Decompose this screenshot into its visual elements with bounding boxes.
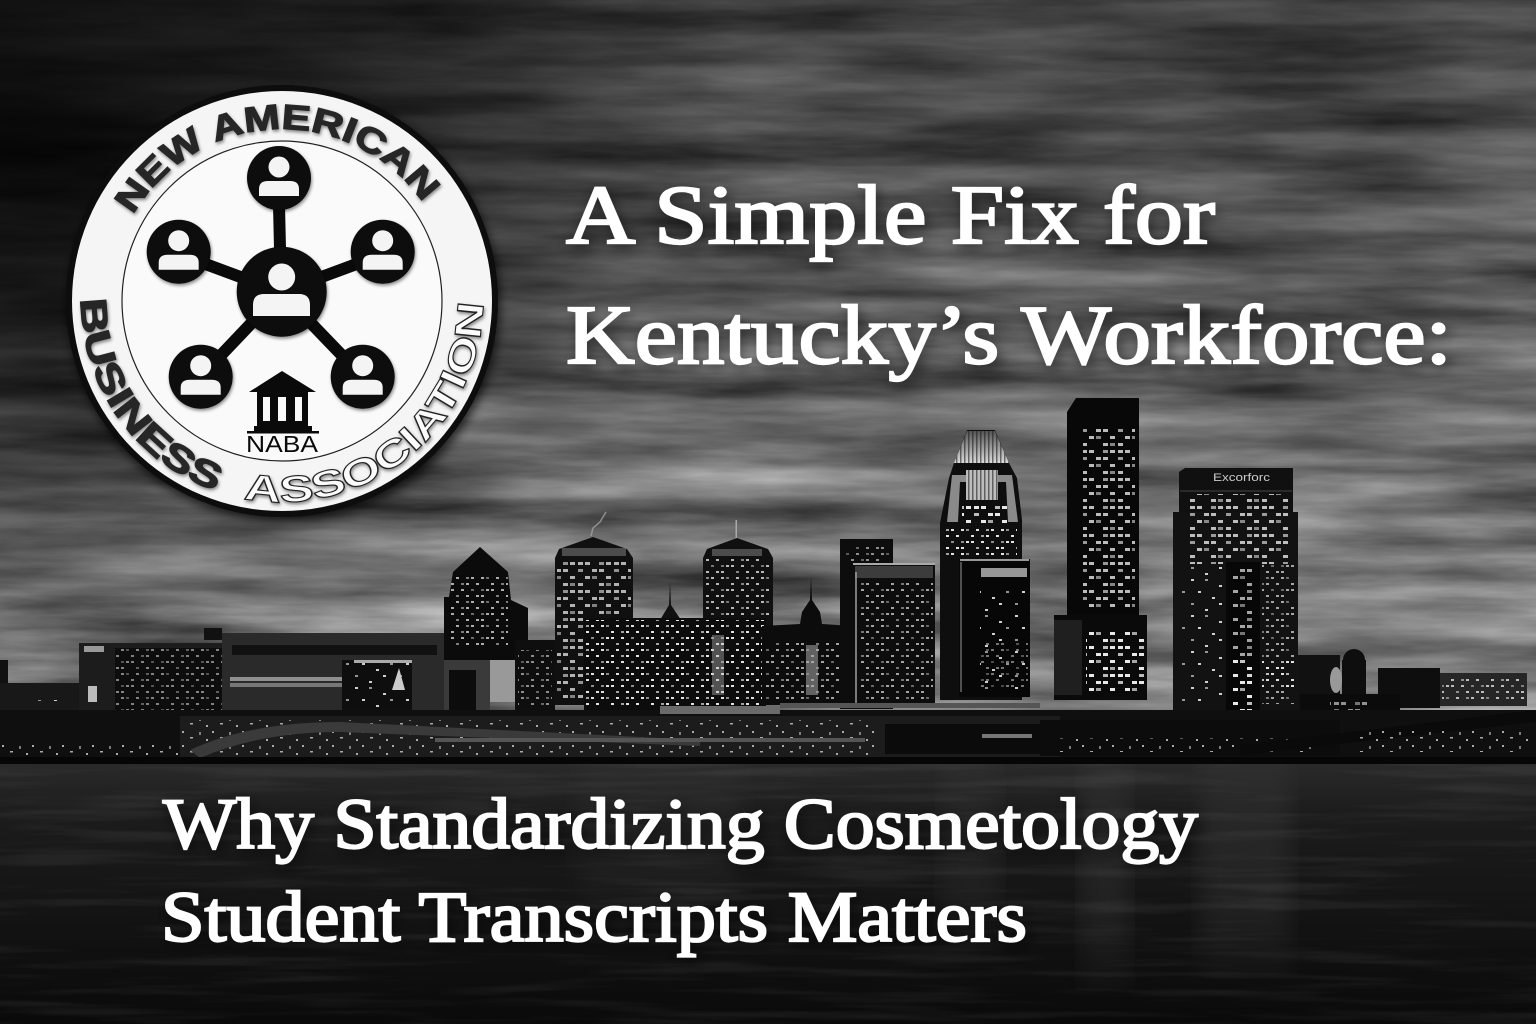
building: twin tower right xyxy=(703,520,773,630)
building: tallest tower xyxy=(1054,398,1147,700)
building: convention hotel xyxy=(79,643,224,728)
title: A Simple Fix for xyxy=(566,169,1215,262)
logo: network connectors xyxy=(200,205,362,372)
title: Kentucky’s Workforce: xyxy=(566,289,1452,382)
title xyxy=(566,169,1452,382)
building: spired block xyxy=(762,577,852,705)
logo: right person node xyxy=(351,220,415,284)
logo: New American Business Association seal xyxy=(66,85,505,528)
logo: center person node xyxy=(237,247,327,337)
background: river water with reflections xyxy=(0,760,1536,1024)
logo: left person node xyxy=(147,220,211,284)
logo: curved text BUSINESS: BUSINESS xyxy=(79,300,224,492)
building: dark front tower xyxy=(959,559,1030,697)
building: convention center hall xyxy=(204,628,520,725)
rooftop sign text: Excorforc xyxy=(1213,472,1271,484)
waterfront and bridges xyxy=(0,703,1536,764)
logo: curved text NEW AMERICAN: NEW AMERICAN xyxy=(113,104,444,216)
building: crown tower xyxy=(940,430,1022,700)
building: small spire xyxy=(660,582,681,620)
building: twin tower left xyxy=(555,512,633,705)
logo: outer ring xyxy=(66,85,498,517)
subtitle xyxy=(161,784,1198,957)
icon: bank building xyxy=(247,371,319,434)
background: cloudy sky xyxy=(0,0,1536,770)
subtitle: Why Standardizing Cosmetology xyxy=(163,784,1198,864)
logo: top person node xyxy=(247,146,311,210)
logo: NABA wordmark: NABA xyxy=(246,431,319,457)
building: low eastern blocks xyxy=(1298,649,1527,726)
logo: bottom-left person node xyxy=(169,345,233,409)
building: glass tower xyxy=(853,563,935,708)
building: wide lit block xyxy=(584,618,766,710)
logo: curved outlined text ASSOCIATION: ASSOCIATION xyxy=(244,303,487,508)
building: far left low block xyxy=(0,660,80,733)
subtitle: Student Transcripts Matters xyxy=(161,877,1027,957)
building: mid-rise behind xyxy=(515,640,555,710)
building: back tower xyxy=(840,539,893,709)
city skyline xyxy=(0,398,1536,764)
building: right tower with rooftop sign xyxy=(1173,468,1298,712)
building: pyramid-top tower xyxy=(444,547,528,660)
logo: bottom-right person node xyxy=(331,345,395,409)
